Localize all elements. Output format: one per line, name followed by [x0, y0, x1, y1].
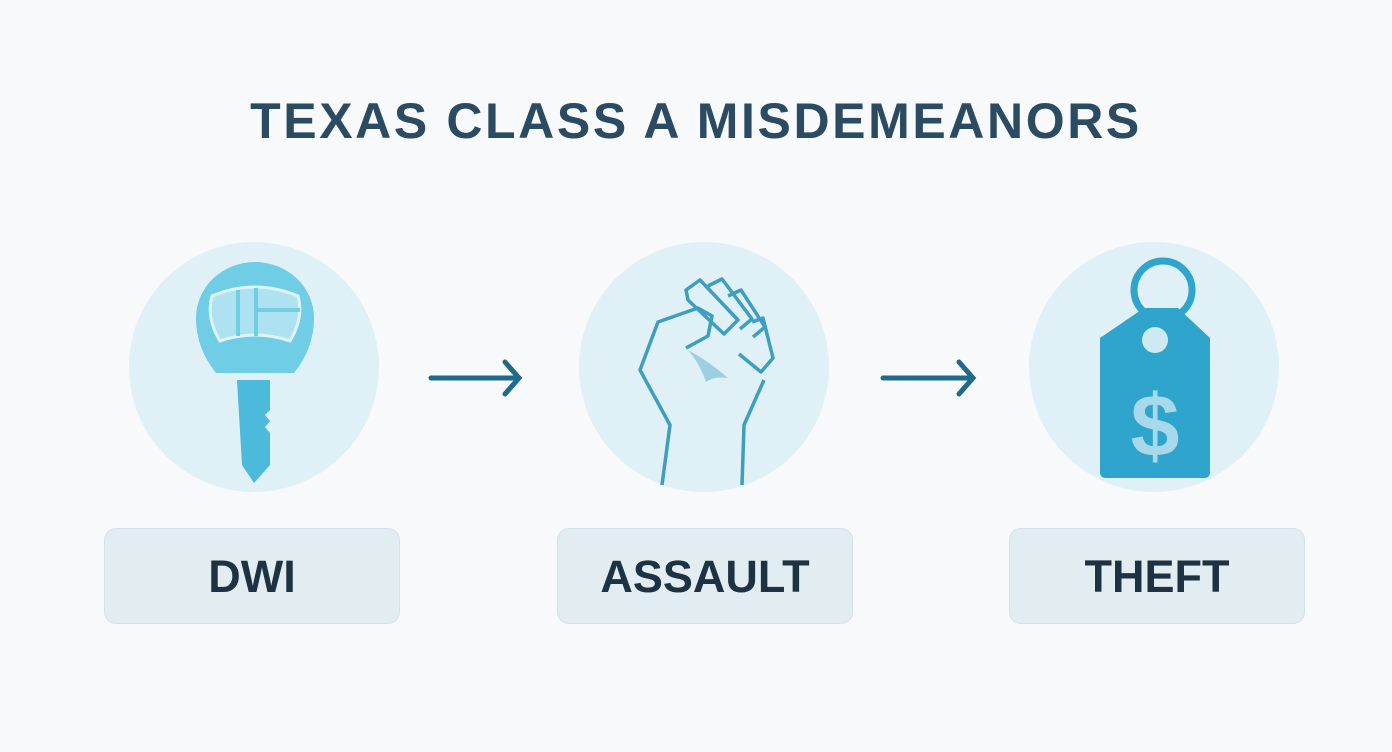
icon: price tag (theft): [1029, 242, 1279, 492]
label: DWI: [104, 528, 400, 624]
icon: price tag (theft): $: [1131, 376, 1179, 475]
label: THEFT: THEFT: [1084, 551, 1229, 602]
label: ASSAULT: [557, 528, 853, 624]
label: DWI: DWI: [208, 551, 296, 602]
label: THEFT: [1009, 528, 1305, 624]
label: ASSAULT: ASSAULT: [600, 551, 810, 602]
arrow 2: [883, 362, 973, 394]
icon: key (DWI): [129, 242, 379, 492]
icon: fist (assault): [579, 242, 829, 492]
title: TEXAS CLASS A MISDEMEANORS: [250, 93, 1142, 149]
arrow 1: [431, 362, 519, 394]
